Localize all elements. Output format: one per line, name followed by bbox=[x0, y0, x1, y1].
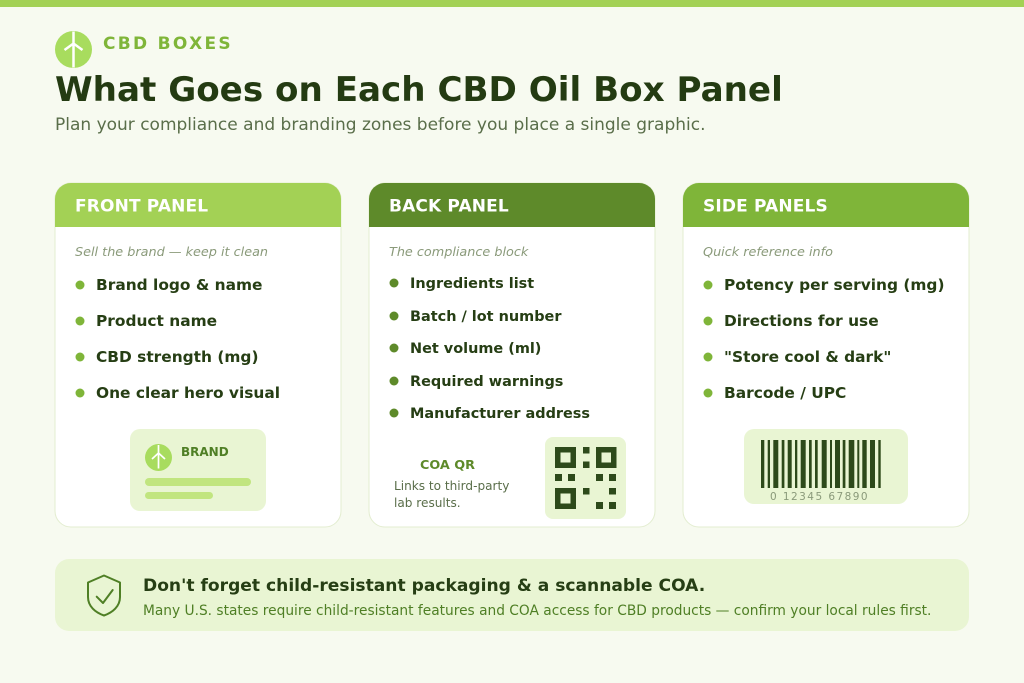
QR code bbox=[545, 437, 626, 519]
back panel list: Net volume (ml) bbox=[410, 341, 541, 357]
back panel list: Manufacturer address bbox=[410, 406, 590, 422]
COA QR note: Links to third-party bbox=[394, 479, 509, 493]
front panel list: Product name bbox=[96, 312, 217, 330]
barcode: 0 12345 67890 bbox=[770, 491, 869, 503]
icon: shield bbox=[88, 576, 120, 616]
side panel list: "Store cool & dark" bbox=[724, 348, 891, 366]
side panel list: Barcode / UPC bbox=[724, 384, 846, 402]
header bbox=[55, 31, 783, 135]
COA QR note: COA QR bbox=[420, 458, 475, 473]
back panel list: Required warnings bbox=[410, 374, 563, 390]
front panel header: FRONT PANEL bbox=[75, 197, 208, 217]
front panel header bbox=[55, 183, 341, 227]
panel: back bbox=[369, 183, 655, 527]
panel: front bbox=[55, 183, 341, 527]
COA QR note bbox=[394, 458, 509, 510]
back panel list bbox=[390, 276, 590, 422]
back panel header bbox=[369, 183, 655, 227]
side panel list: Potency per serving (mg) bbox=[724, 276, 944, 294]
callout bbox=[55, 559, 969, 631]
side panel tagline: Quick reference info bbox=[703, 245, 833, 260]
title: What Goes on Each CBD Oil Box Panel bbox=[55, 70, 783, 110]
callout body: Many U.S. states require child-resistant features and COA access for CBD products — confirm your local rules first. bbox=[143, 603, 931, 619]
back panel list: Batch / lot number bbox=[410, 309, 562, 325]
callout heading: Don't forget child-resistant packaging & a scannable COA. bbox=[143, 576, 705, 596]
subtitle: Plan your compliance and branding zones before you place a single graphic. bbox=[55, 115, 706, 135]
front panel list bbox=[76, 276, 280, 402]
brand mockup: BRAND bbox=[181, 445, 229, 459]
front panel list: CBD strength (mg) bbox=[96, 348, 258, 366]
brand mockup bbox=[130, 429, 266, 511]
panel: side bbox=[683, 183, 969, 527]
eyebrow label: CBD BOXES bbox=[103, 34, 233, 54]
side panel header bbox=[683, 183, 969, 227]
front panel tagline: Sell the brand — keep it clean bbox=[75, 245, 268, 260]
front panel list: Brand logo & name bbox=[96, 276, 262, 294]
back panel header: BACK PANEL bbox=[389, 197, 509, 217]
side panel header: SIDE PANELS bbox=[703, 197, 828, 217]
back panel list: Ingredients list bbox=[410, 276, 534, 292]
COA QR note: lab results. bbox=[394, 496, 461, 510]
barcode bbox=[744, 429, 908, 504]
icon: brand logo bbox=[55, 31, 92, 68]
back panel tagline: The compliance block bbox=[389, 245, 529, 260]
side panel list: Directions for use bbox=[724, 312, 879, 330]
side panel list bbox=[704, 276, 944, 402]
front panel list: One clear hero visual bbox=[96, 384, 280, 402]
